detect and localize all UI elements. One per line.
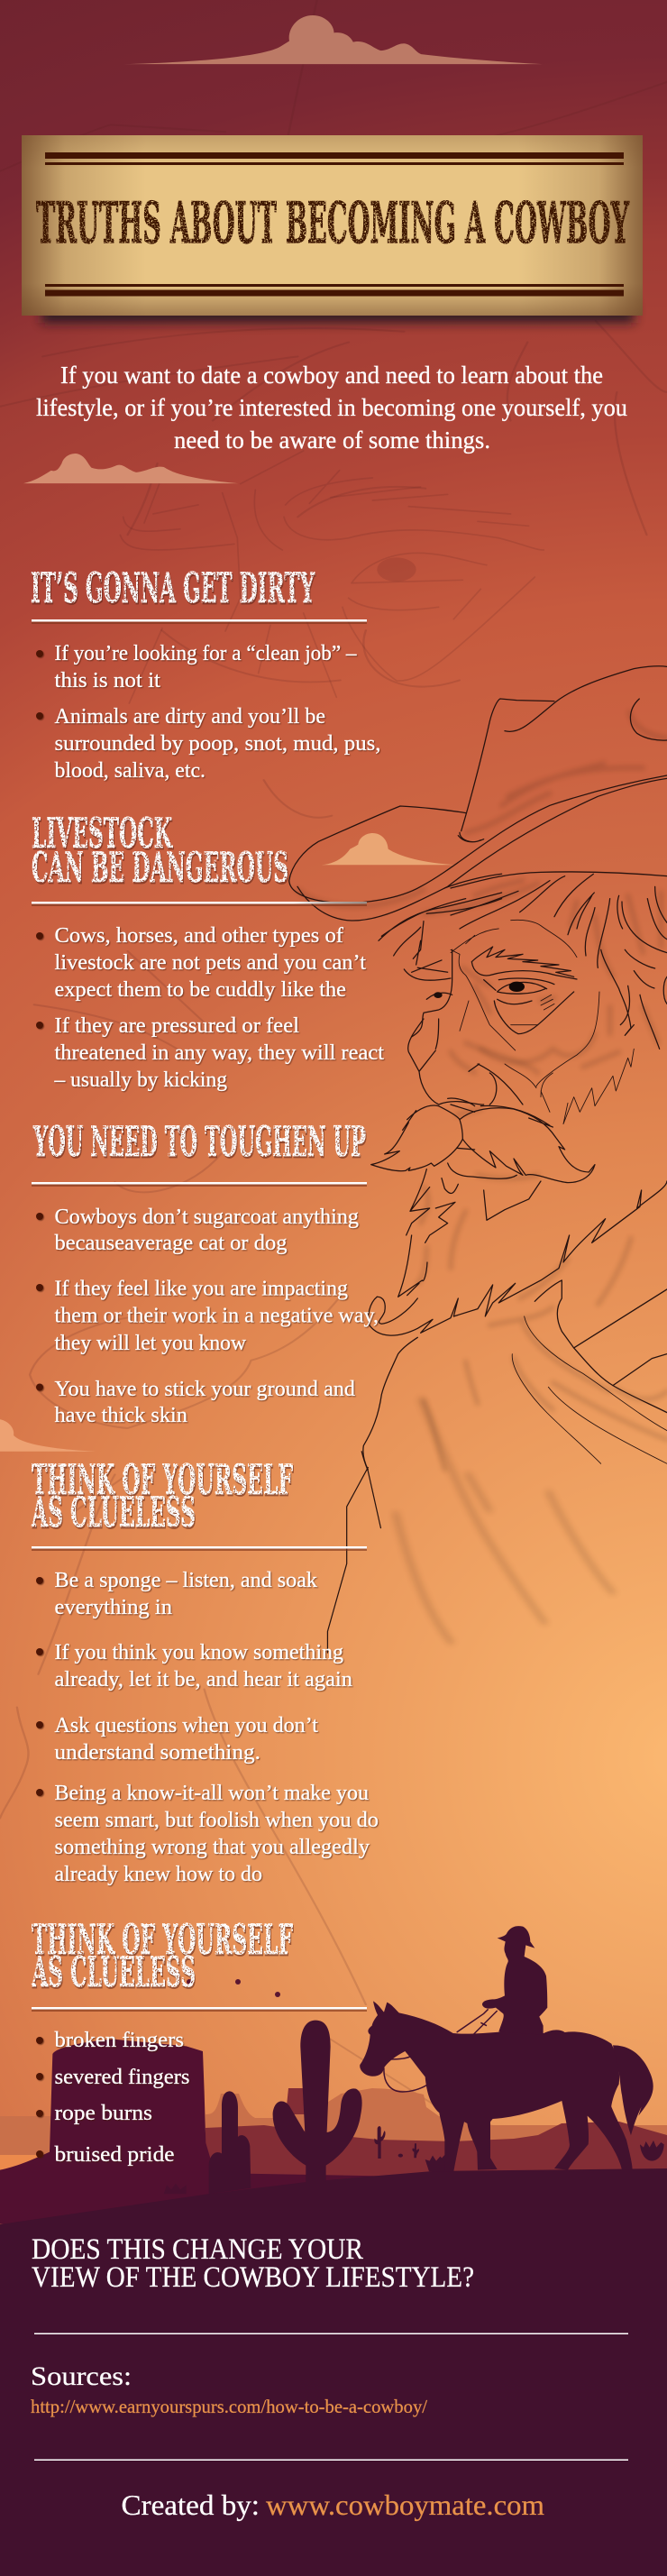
title banner <box>22 135 643 323</box>
bullet list: Cowboys don’t sugarcoat anything <box>54 1205 359 1229</box>
tail <box>613 2045 653 2135</box>
face, eye and hair <box>451 872 667 1127</box>
intro text: If you want to date a cowboy and need to learn about the <box>60 362 603 389</box>
divider <box>34 2460 628 2461</box>
heading <box>31 1915 293 1996</box>
section: think of yourself as clueless <box>31 1455 379 1886</box>
bullet list: If they feel like you are impacting <box>54 1277 348 1300</box>
closing question: VIEW OF THE COWBOY LIFESTYLE? <box>32 2261 474 2294</box>
bullet list: You have to stick your ground and <box>54 1378 355 1401</box>
horse <box>360 2001 633 2171</box>
cloud: behind hat brim <box>322 833 457 865</box>
intro text: lifestyle, or if you’re interested in becoming one yourself, you <box>36 394 627 421</box>
moustache, beard and shoulders <box>363 1019 667 1470</box>
bullet list: If you’re looking for a “clean job” – <box>54 642 357 665</box>
bullet list: seem smart, but foolish when you do <box>54 1809 379 1832</box>
far mesa band <box>0 2088 667 2182</box>
bullet list <box>36 2029 189 2167</box>
heading: THINK OF YOURSELF <box>32 1455 293 1504</box>
mid desert band <box>206 2122 667 2209</box>
bullet list: they will let you know <box>54 1332 247 1355</box>
heading: THINK OF YOURSELF <box>32 1915 293 1964</box>
heading: AS CLUELESS <box>31 1948 196 1996</box>
cloud: top <box>123 15 543 64</box>
bullet list: broken fingers <box>54 2029 184 2052</box>
small birds <box>187 1979 280 1997</box>
heading: LIVESTOCK <box>32 809 173 857</box>
lighter ground near tombstone <box>0 2155 153 2191</box>
bullet list: surrounded by poop, snot, mud, pus, <box>54 732 380 756</box>
cloud: beneath intro <box>23 454 238 483</box>
bullet list: understand something. <box>54 1741 260 1765</box>
section: it's gonna get dirty <box>31 564 380 783</box>
bottom double bars <box>45 284 624 296</box>
credit <box>121 2489 544 2521</box>
bullet list: – usually by kicking <box>54 1068 227 1092</box>
rule <box>32 2007 367 2012</box>
cloud: left edge <box>0 1419 96 1452</box>
banner shadow <box>41 303 635 323</box>
heading: CAN BE DANGEROUS <box>32 843 288 892</box>
small cacti and shrubs <box>374 2126 419 2159</box>
bullet list: If you think you know something <box>54 1641 343 1664</box>
bullet list: expect them to be cuddly like the <box>54 978 346 1002</box>
tombstone-shaped butte <box>0 2040 379 2224</box>
bullet list: already knew how to do <box>54 1863 262 1886</box>
cactus: large saguaro <box>273 2021 362 2182</box>
desert landscape <box>0 1926 667 2576</box>
hat and left eye <box>289 666 667 1037</box>
sources: Sources: <box>31 2361 132 2391</box>
bullet list: Ask questions when you don’t <box>54 1714 318 1737</box>
heading <box>31 1455 293 1536</box>
rider <box>482 1926 547 2035</box>
cactus: small cluster <box>164 2091 251 2194</box>
bullet list <box>36 1569 379 1886</box>
heading: AS CLUELESS <box>31 1488 196 1536</box>
closing question <box>32 2233 474 2294</box>
bullet list: severed fingers <box>54 2066 189 2089</box>
bullet list <box>36 1205 379 1427</box>
heading <box>32 809 288 892</box>
sources <box>31 2361 427 2417</box>
bullet list: this is not it <box>54 669 160 692</box>
heading: IT’S GONNA GET DIRTY <box>31 564 315 612</box>
credit: Created by: <box>121 2489 260 2521</box>
closing question: DOES THIS CHANGE YOUR <box>32 2233 363 2266</box>
rule <box>32 619 367 624</box>
rule <box>32 902 367 906</box>
bullet list: If they are pressured or feel <box>54 1014 299 1038</box>
intro text: need to be aware of some things. <box>174 426 490 454</box>
dark mesa in mid band <box>286 2088 311 2114</box>
reins <box>384 2009 498 2092</box>
section: think of yourself as clueless, injuries <box>31 1915 367 2167</box>
bullet list: something wrong that you allegedly <box>54 1836 370 1859</box>
section: you need to toughen up <box>32 1117 379 1427</box>
bullet list: blood, saliva, etc. <box>54 759 206 783</box>
top double bars <box>45 152 624 165</box>
bullet list <box>36 924 384 1092</box>
bullet list: becauseaverage cat or dog <box>54 1232 287 1255</box>
bullet list: threatened in any way, they will react <box>54 1041 384 1065</box>
coat outline <box>327 1399 613 1653</box>
bullet list: already, let it be, and hear it again <box>54 1668 352 1691</box>
bullet list: Being a know-it-all won’t make you <box>54 1782 369 1805</box>
banner plate <box>22 135 643 316</box>
rule <box>32 1546 367 1551</box>
bullet list: rope burns <box>54 2102 152 2125</box>
divider <box>34 2333 628 2334</box>
bullet list: livestock are not pets and you can’t <box>54 951 366 975</box>
bullet list: them or their work in a negative way, <box>54 1305 379 1328</box>
foreground ground <box>0 2168 667 2576</box>
bullet list: have thick skin <box>54 1404 187 1427</box>
bullet list: Animals are dirty and you’ll be <box>54 705 325 729</box>
bullet list: Cows, horses, and other types of <box>54 924 343 948</box>
bullet list: everything in <box>54 1596 172 1619</box>
rule <box>32 1182 367 1187</box>
credit: www.cowboymate.com <box>266 2489 544 2521</box>
illustration: bearded cowboy portrait <box>289 666 667 1653</box>
bullet list <box>36 642 380 783</box>
bullet list: Be a sponge – listen, and soak <box>54 1569 317 1592</box>
intro text <box>36 362 627 454</box>
section: livestock can be dangerous <box>32 809 384 1092</box>
sources: http://www.earnyourspurs.com/how-to-be-a-cowboy/ <box>31 2396 427 2417</box>
bullet list: bruised pride <box>54 2143 175 2167</box>
horse and rider silhouette <box>360 1926 664 2171</box>
